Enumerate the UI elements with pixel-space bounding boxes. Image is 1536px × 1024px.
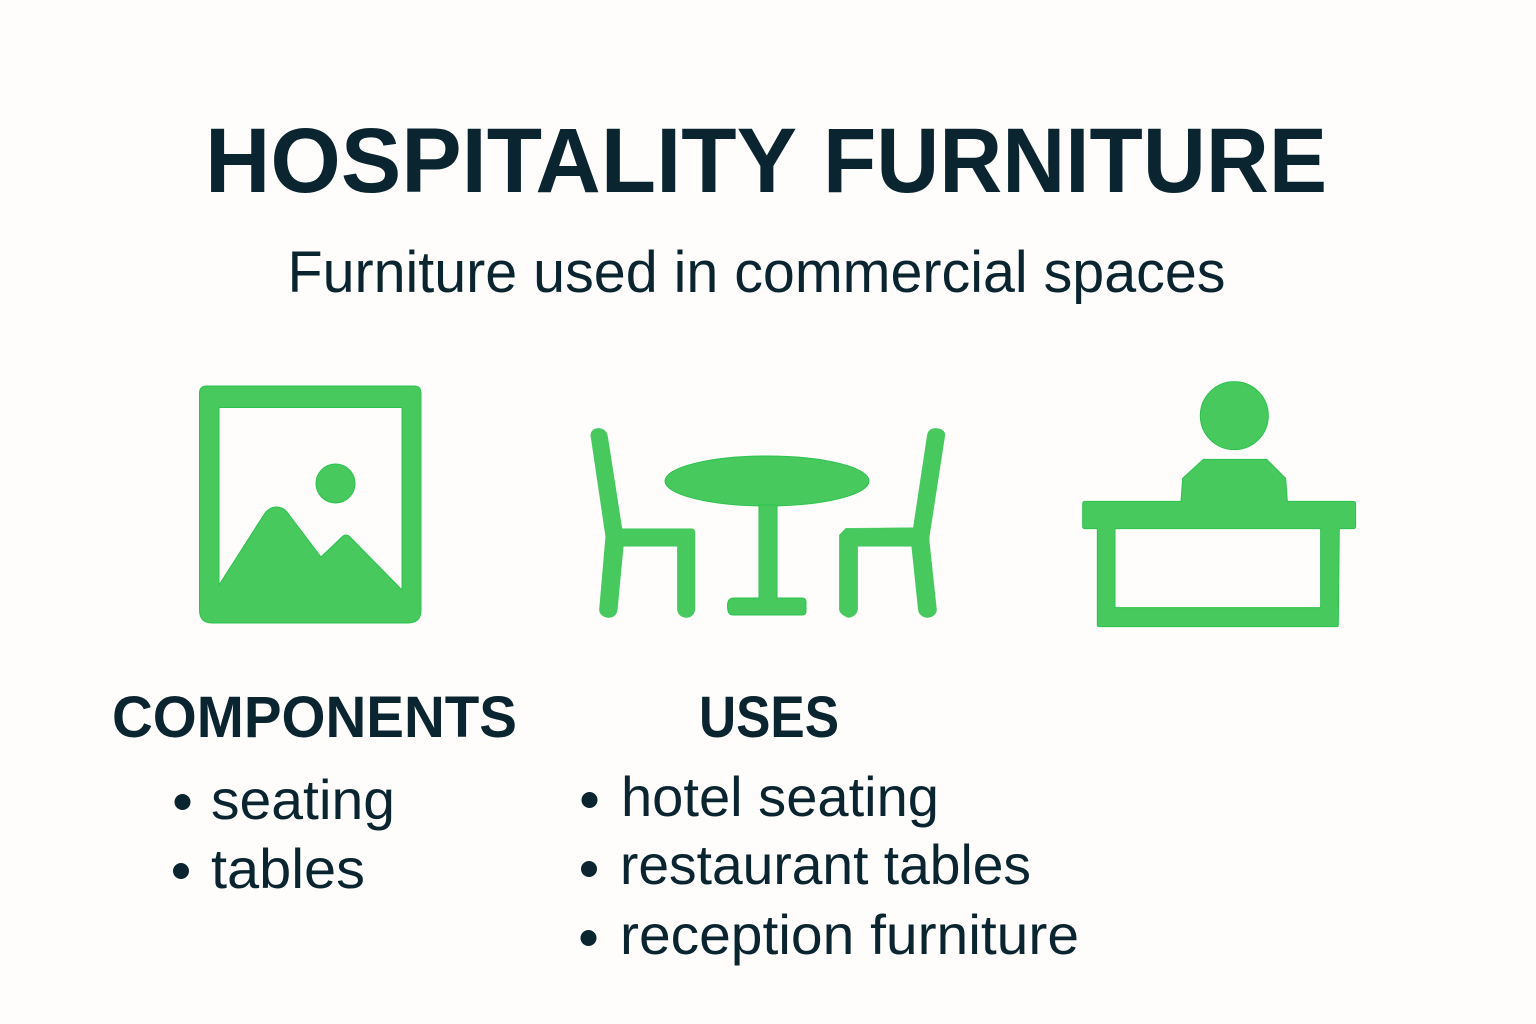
heading: components: COMPONENTS bbox=[112, 685, 517, 750]
table stem and base bbox=[728, 505, 806, 615]
item: restaurant tables: restaurant tables bbox=[620, 833, 1031, 896]
subtitle: Furniture used in commercial spaces bbox=[288, 240, 1226, 305]
icon: reception desk bbox=[1083, 382, 1356, 627]
person head bbox=[1200, 382, 1268, 450]
icon: picture sun bbox=[316, 464, 355, 503]
bullet bbox=[582, 792, 598, 808]
icon: table and two chairs bbox=[591, 428, 945, 618]
table top bbox=[665, 456, 869, 506]
heading: uses: USES bbox=[699, 685, 839, 750]
item: tables: tables bbox=[211, 837, 365, 900]
title: HOSPITALITY bbox=[205, 110, 797, 212]
item: seating: seating bbox=[211, 768, 395, 831]
right chair bbox=[839, 428, 945, 618]
bullet bbox=[580, 930, 596, 946]
title bbox=[205, 110, 1327, 212]
bullet bbox=[581, 861, 597, 877]
title: FURNITURE bbox=[823, 110, 1327, 212]
bullet bbox=[174, 794, 190, 810]
desk and person body bbox=[1083, 459, 1356, 627]
list: uses bbox=[580, 765, 1079, 966]
list: components bbox=[173, 768, 395, 900]
item: reception furniture: reception furniture bbox=[620, 903, 1079, 966]
bullet bbox=[173, 863, 189, 879]
item: hotel seating: hotel seating bbox=[621, 765, 939, 828]
left chair bbox=[591, 428, 695, 618]
icon: framed picture bbox=[200, 386, 421, 623]
